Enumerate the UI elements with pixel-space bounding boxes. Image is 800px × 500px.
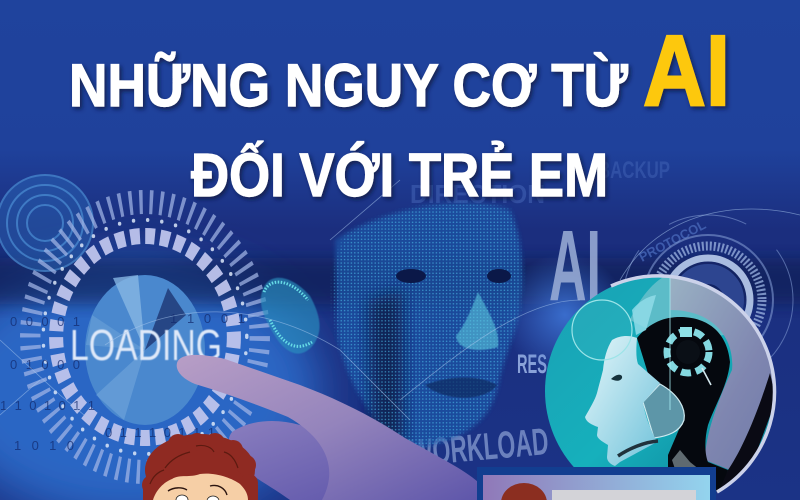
blue lower-left wash — [0, 260, 320, 500]
face mask — [585, 336, 660, 466]
upper translucent panel — [630, 278, 724, 336]
neck noise — [672, 450, 696, 467]
loading dial — [30, 202, 260, 472]
dial dot ring — [43, 220, 247, 454]
right eye — [487, 269, 511, 283]
card frame — [477, 467, 716, 500]
face dotted surface — [330, 201, 525, 448]
disc white rim — [611, 276, 775, 492]
left eye — [396, 269, 426, 283]
title — [69, 15, 730, 209]
binary digit rows: 0 0 0 0 1 — [10, 314, 80, 329]
thumb — [229, 421, 440, 500]
card avatar hair — [501, 483, 547, 500]
card gradient — [483, 475, 710, 500]
faded tech words: DIRECTION — [410, 179, 545, 209]
thin network lines — [0, 180, 800, 420]
face — [153, 474, 248, 500]
dial inner block ring — [56, 236, 234, 438]
mouth — [425, 378, 497, 398]
eye — [611, 375, 622, 381]
faded tech words: RES — [517, 349, 547, 379]
faded tech words: PROTOCOL — [636, 217, 708, 265]
loading label: LOADING — [70, 321, 222, 370]
boy character — [142, 433, 258, 500]
neck mechanics — [643, 384, 684, 438]
dial outer tick ring — [30, 202, 260, 472]
crown highlight — [632, 295, 656, 335]
gear ring — [667, 331, 709, 373]
binary digit rows: 0 1 1 1 0 1 1 1 — [105, 425, 215, 440]
dark band behind the tech imagery — [0, 258, 800, 304]
glow behind AI word — [503, 253, 627, 377]
disc teal base — [545, 276, 775, 500]
left brow — [168, 488, 187, 491]
nose glow — [456, 292, 498, 350]
right eye — [207, 496, 219, 500]
shell panel right of line — [670, 275, 780, 470]
binary digit rows: 1 1 0 1 0 1 1 — [0, 398, 95, 413]
binary digit rows: 1 1 0 0 1 — [170, 311, 245, 326]
faded tech words — [409, 157, 708, 475]
thin circle overlay — [572, 300, 632, 360]
right brow — [210, 485, 227, 495]
pointing hand — [177, 355, 478, 500]
hair curls — [150, 445, 238, 484]
wireframe face — [261, 195, 530, 460]
lower-right black back — [720, 373, 773, 488]
protocol dial — [623, 215, 793, 385]
curly hair — [142, 433, 258, 500]
jaw band — [618, 441, 658, 456]
binary digit rows: 1 0 1 0 — [14, 438, 74, 453]
index finger — [177, 355, 478, 500]
black cranium — [637, 317, 730, 500]
gear notch — [680, 327, 692, 337]
title line 1: NHỮNG NGUY CƠ TỪ — [69, 52, 628, 119]
gear spoke — [702, 368, 711, 385]
card grey text bar — [552, 490, 696, 500]
centre light line — [670, 278, 671, 410]
title line 2: ĐỐI VỚI TRẺ EM — [191, 141, 608, 209]
binary digit rows — [0, 311, 245, 453]
faded tech words: BACKUP — [598, 157, 670, 184]
concentric radar top left — [0, 175, 93, 271]
binary digit rows: 0 1 0 0 0 — [10, 357, 80, 372]
faded AI word: AI — [549, 210, 601, 322]
dial centre pie — [85, 275, 205, 425]
left eye — [176, 495, 188, 500]
robot head disc — [545, 275, 780, 500]
title highlight AI: AI — [643, 15, 730, 127]
face glow — [335, 203, 522, 452]
dark side of face — [368, 290, 404, 450]
faded tech words: WORKLOAD — [409, 421, 550, 475]
ear mesh — [261, 278, 320, 354]
bottom card — [477, 467, 716, 500]
